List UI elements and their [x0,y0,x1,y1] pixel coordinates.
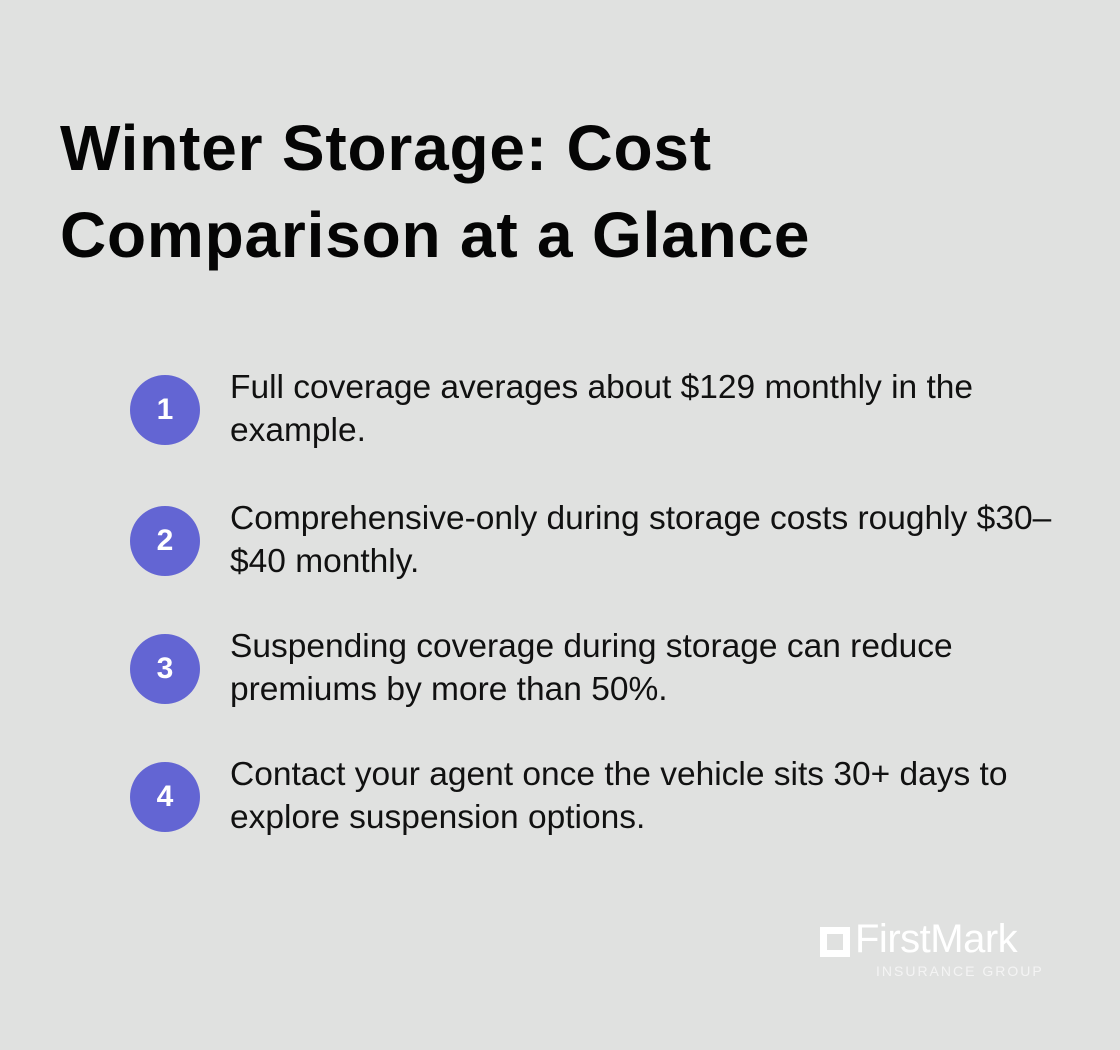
title: Winter Storage: Cost [60,112,712,184]
title [60,112,810,271]
text 3: premiums by more than 50%. [230,671,668,708]
icon: number 1: 1 [157,393,173,426]
icon: number 2: 2 [157,524,173,557]
text 2 [230,500,1052,580]
text 4: explore suspension options. [230,799,645,836]
icon: number 3 [130,634,200,704]
text 1 [230,369,973,449]
logo: FirstMark [855,917,1017,961]
logo: INSURANCE GROUP [876,963,1044,979]
title: Comparison at a Glance [60,199,810,271]
text 4 [230,756,1008,836]
text 3: Suspending coverage during storage can reduce [230,628,953,665]
text 3 [230,628,953,708]
text 1: example. [230,412,366,449]
icon: number 4: 4 [157,780,173,813]
text 1: Full coverage averages about $129 monthly in the [230,369,973,406]
icon: number 3: 3 [157,652,173,685]
item 4 [130,756,1008,836]
item 1 [130,369,973,449]
logo [820,917,1044,979]
text 2: $40 monthly. [230,543,419,580]
item 3 [130,628,953,708]
icon: number 4 [130,762,200,832]
text 2: Comprehensive-only during storage costs roughly $30– [230,500,1051,537]
text 4: Contact your agent once the vehicle sits 30+ days to [230,756,1008,793]
icon: number 1 [130,375,200,445]
item 2 [130,500,1052,580]
icon: number 2 [130,506,200,576]
